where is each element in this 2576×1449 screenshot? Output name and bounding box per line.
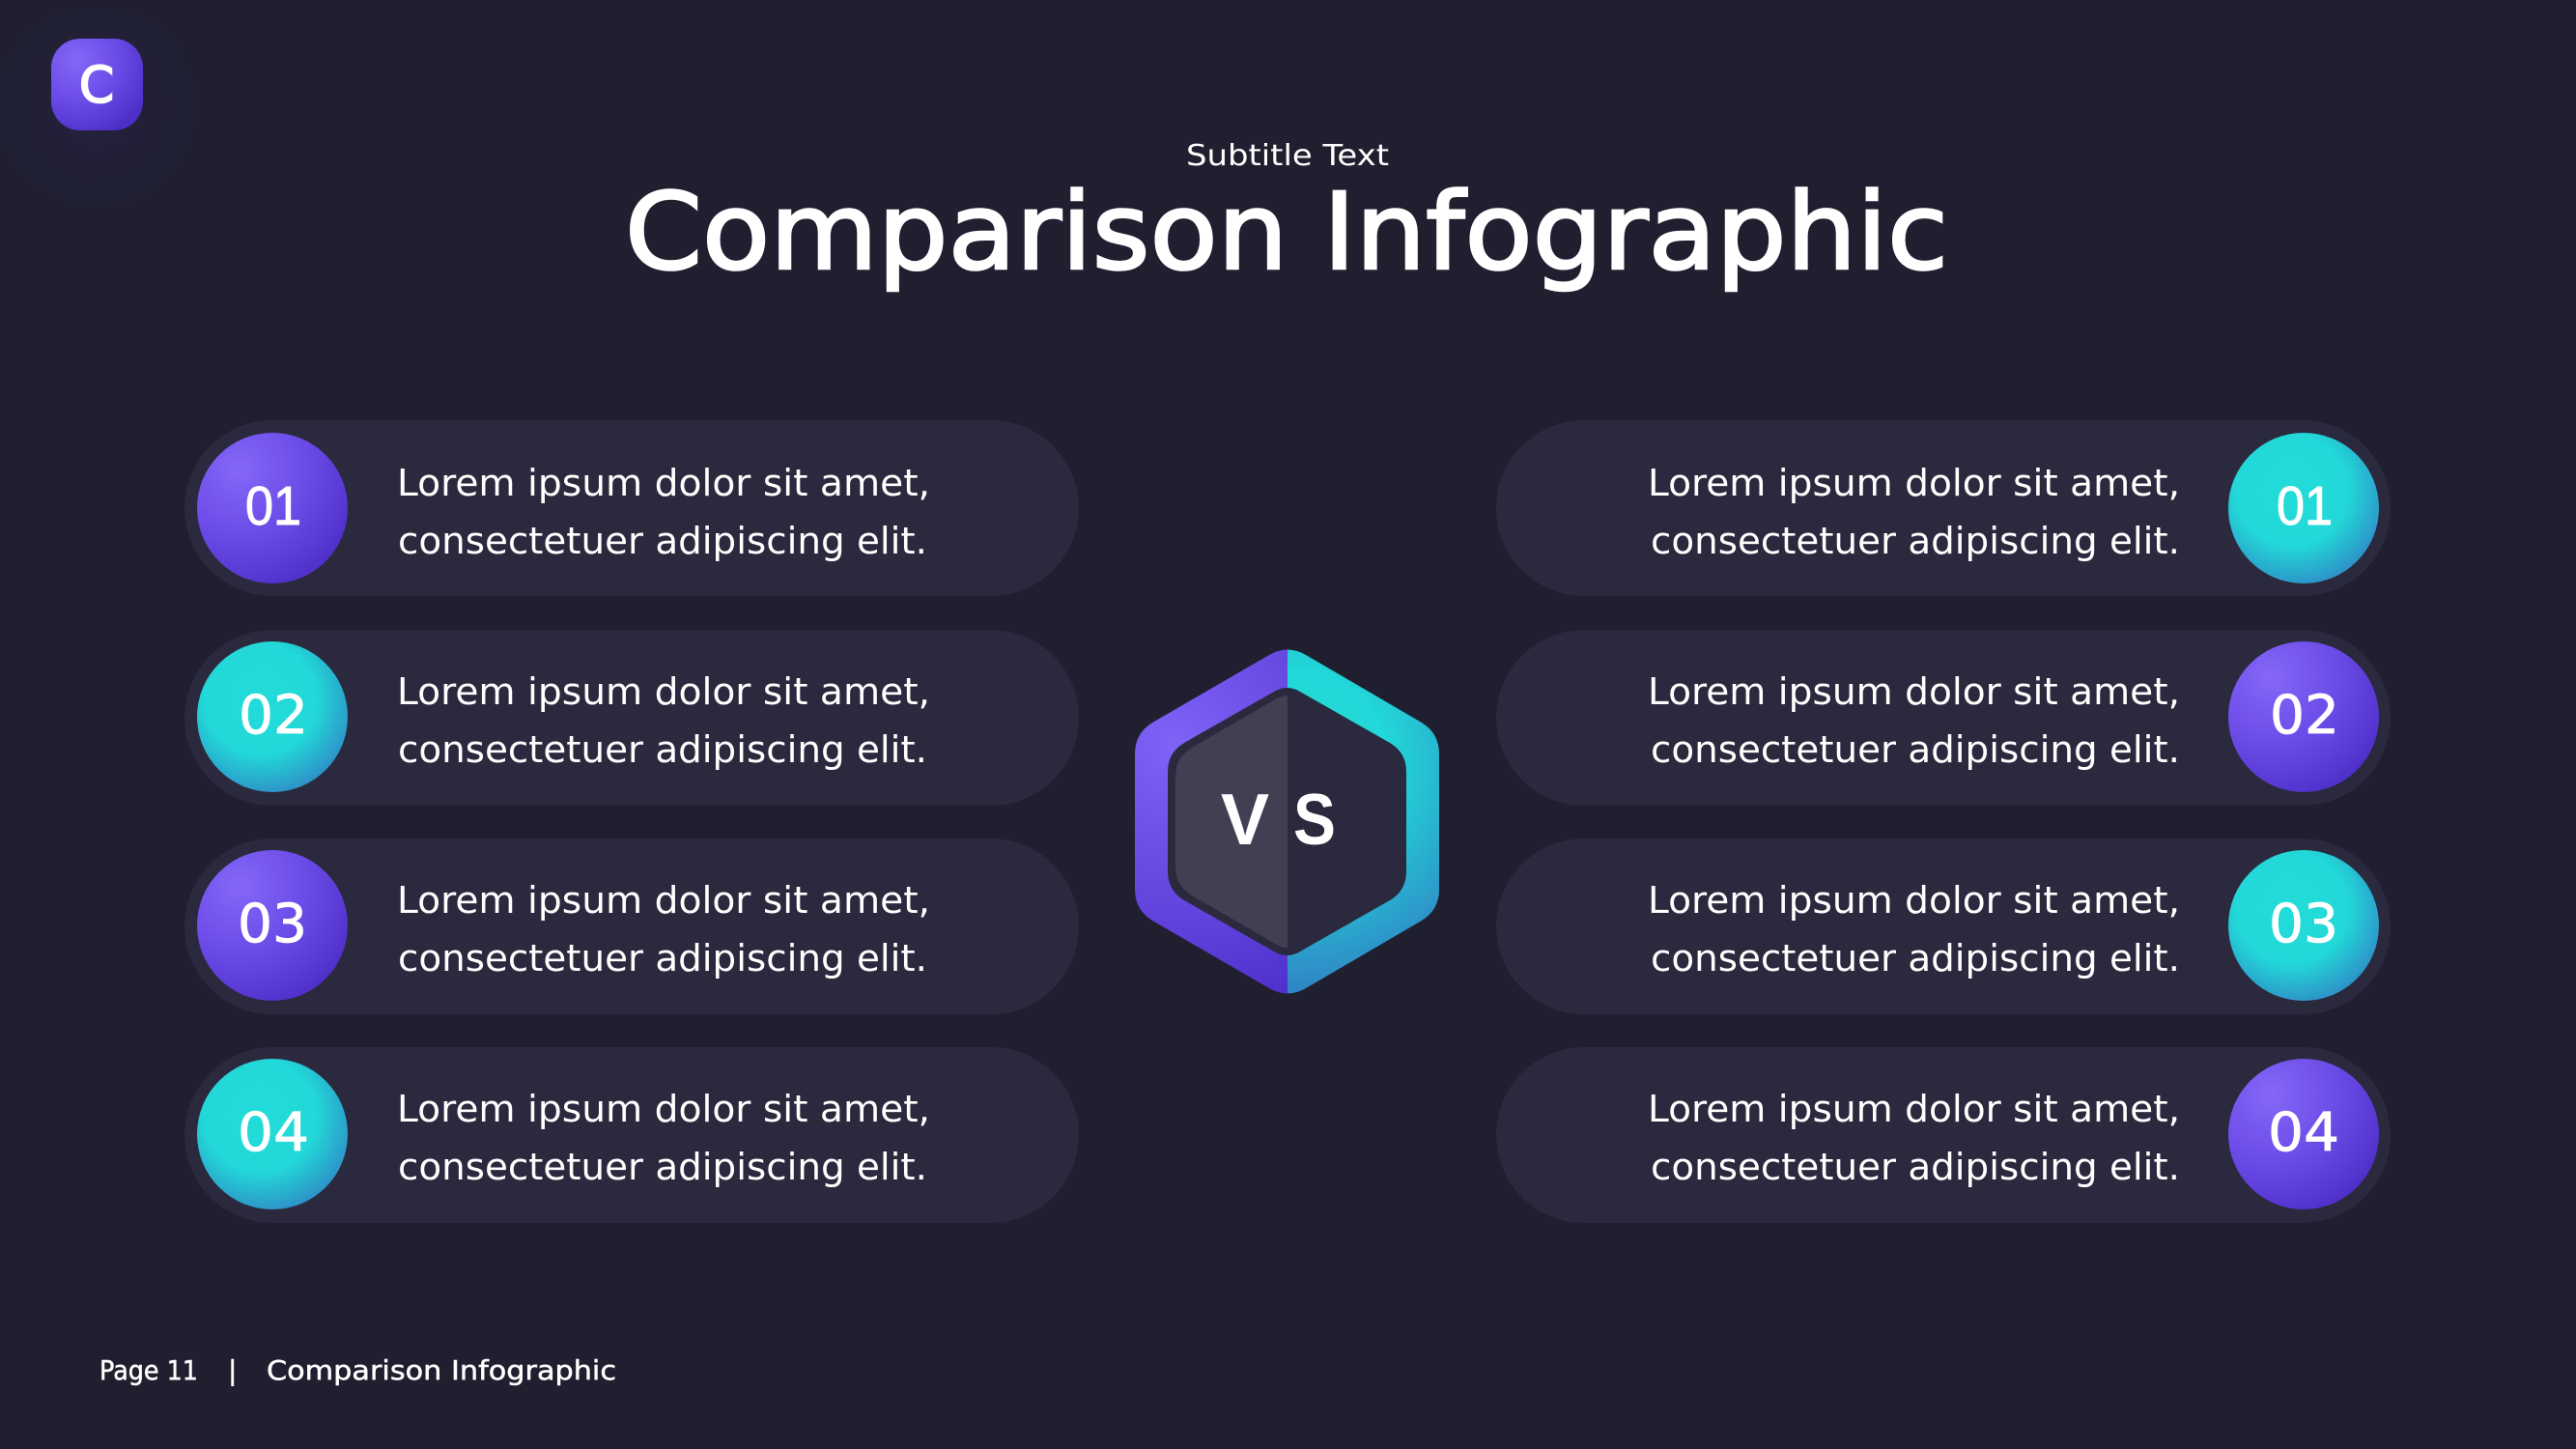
- panel: left item 04: 04: [238, 1101, 309, 1163]
- panel: left item 04: Lorem ipsum dolor sit amet,: [397, 1088, 930, 1130]
- panel: left item 04: consectetuer adipiscing elit.: [398, 1146, 927, 1188]
- panel: right item 03: 03: [2269, 893, 2338, 954]
- panel: left item 02: Lorem ipsum dolor sit amet,: [397, 670, 930, 713]
- panel: right item 04: 04: [2268, 1101, 2339, 1163]
- panel: left item 01: 01: [245, 475, 301, 537]
- logo badge: C: [79, 57, 114, 115]
- panel: right item 01: 01: [2277, 475, 2333, 537]
- panel: left item 02: 02: [239, 684, 308, 746]
- panel: right item 02: [1496, 630, 2391, 806]
- panel: left item 03: consectetuer adipiscing elit.: [398, 937, 927, 980]
- logo badge: [0, 0, 217, 227]
- footer: Comparison Infographic: [267, 1354, 616, 1386]
- footer: [99, 1354, 616, 1386]
- panel: left item 03: [184, 838, 1079, 1014]
- icon: VS hexagon: S: [1293, 779, 1336, 860]
- footer: Page 11: [99, 1354, 198, 1386]
- panel: right item 03: Lorem ipsum dolor sit amet,: [1648, 879, 2180, 922]
- panel: left item 03: Lorem ipsum dolor sit amet,: [397, 879, 930, 922]
- subtitle: Subtitle Text: [1186, 139, 1389, 173]
- panel: right item 04: consectetuer adipiscing elit.: [1651, 1146, 2180, 1188]
- panel: left item 03: 03: [238, 893, 307, 954]
- panel: right item 04: Lorem ipsum dolor sit amet,: [1648, 1088, 2180, 1130]
- panel: right item 02: 02: [2270, 684, 2339, 746]
- panel: left item 01: consectetuer adipiscing elit.: [398, 520, 927, 562]
- panel: left item 02: consectetuer adipiscing elit.: [398, 728, 927, 771]
- panel: right item 01: consectetuer adipiscing elit.: [1651, 520, 2180, 562]
- panel: left item 01: Lorem ipsum dolor sit amet,: [397, 462, 930, 504]
- panel: left item 04: [184, 1047, 1079, 1223]
- icon: VS hexagon: [1135, 649, 1439, 993]
- panel: left item 01: [184, 420, 1079, 596]
- panel: right item 01: Lorem ipsum dolor sit amet,: [1648, 462, 2180, 504]
- panel: right item 04: [1496, 1047, 2391, 1223]
- panel: right item 03: consectetuer adipiscing elit.: [1651, 937, 2180, 980]
- panel: right item 01: [1496, 420, 2391, 596]
- icon: VS hexagon: V: [1221, 779, 1269, 860]
- panel: right item 02: consectetuer adipiscing elit.: [1651, 728, 2180, 771]
- title: Comparison Infographic: [625, 170, 1948, 294]
- panel: right item 02: Lorem ipsum dolor sit amet,: [1648, 670, 2180, 713]
- panel: left item 02: [184, 630, 1079, 806]
- footer: |: [228, 1354, 237, 1386]
- panel: right item 03: [1496, 838, 2391, 1014]
